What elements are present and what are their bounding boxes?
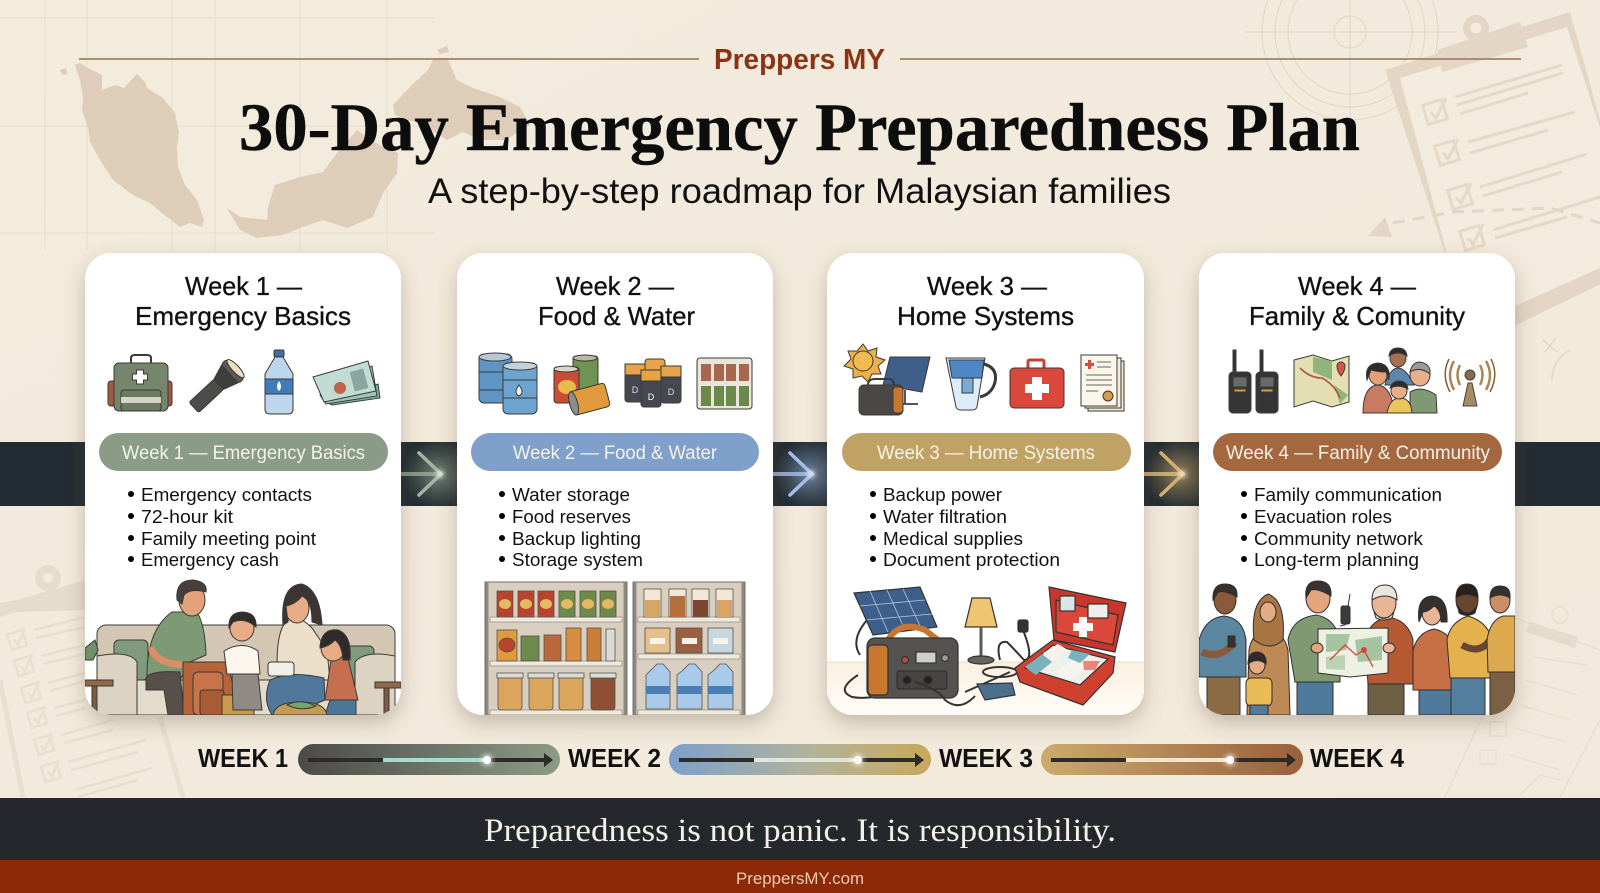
- icon: batteries: D: [648, 392, 655, 402]
- heading: week 2: Food & Water: [538, 301, 695, 331]
- arrow: week 1 to 2: [401, 442, 457, 506]
- pill: week 2: Week 2 — Food & Water: [513, 442, 717, 464]
- pill: week 1: [99, 433, 388, 471]
- icon: water barrels: [479, 353, 537, 414]
- map of Malaysia watermark: [60, 46, 530, 238]
- dark timeline band: [0, 442, 1600, 506]
- panel: week 1: [85, 253, 401, 715]
- list: week 3 actions: Medical supplies: [883, 528, 1023, 549]
- icon: cash banknotes: [313, 361, 380, 405]
- heading: week 4: Week 4 —: [1298, 271, 1416, 301]
- illustration: pantry shelves: [485, 582, 745, 715]
- icon: walkie talkies: [1229, 350, 1278, 413]
- tagline bar: [0, 798, 1600, 860]
- list: week 4 actions: Family communication: [1254, 484, 1442, 505]
- icon: batteries: D: [668, 387, 675, 397]
- heading: week 1: Week 1 —: [185, 271, 302, 301]
- icon: water filter pitcher: [946, 358, 996, 410]
- subtitle: A step-by-step roadmap for Malaysian families: [428, 172, 1171, 211]
- progress bar: week 2 to 3: [669, 744, 931, 775]
- progress bar: week 1 to 2: [298, 744, 560, 775]
- icon: family group: [1363, 348, 1437, 413]
- arrow: week 2 to 3: [773, 442, 827, 506]
- list: week 4 actions: Long-term planning: [1254, 549, 1419, 570]
- clipboard watermark bottom left: [0, 565, 183, 797]
- panel: week 4: [1199, 253, 1515, 715]
- label: week 3: WEEK 3: [939, 743, 1033, 773]
- heading: week 3: Home Systems: [897, 301, 1074, 331]
- icon: water bottle: [265, 350, 293, 414]
- list: week 1 actions: Emergency cash: [141, 549, 279, 570]
- heading: week 3: [897, 271, 1074, 331]
- heading: week 4: [1249, 271, 1465, 331]
- list: week 3 actions: Water filtration: [883, 506, 1007, 527]
- title: 30-Day Emergency Preparedness Plan: [239, 89, 1360, 165]
- list: week 1 actions: Emergency contacts: [141, 484, 312, 505]
- progress bar: week 3 to 4: [1041, 744, 1303, 775]
- list: week 2 actions: Water storage: [512, 484, 630, 505]
- illustration: solar power station and medical case: [827, 587, 1144, 715]
- label: week 1: WEEK 1: [198, 743, 288, 773]
- icon: batteries: [625, 359, 681, 407]
- list: week 1 actions: 72-hour kit: [141, 506, 233, 527]
- list: week 2 actions: Backup lighting: [512, 528, 641, 549]
- list: week 2 actions: Food reserves: [512, 506, 631, 527]
- clipboard watermark bottom right: [1445, 607, 1600, 797]
- list: week 3 actions: [870, 484, 1060, 570]
- list: week 2 actions: Storage system: [512, 549, 643, 570]
- pill: week 4: [1213, 433, 1502, 471]
- pill: week 4: Week 4 — Family & Community: [1226, 442, 1490, 464]
- heading: week 4: Family & Comunity: [1249, 301, 1465, 331]
- pill: week 3: [842, 433, 1131, 471]
- list: week 1 actions: Family meeting point: [141, 528, 316, 549]
- label: week 4: WEEK 4: [1310, 743, 1405, 773]
- heading: week 1: [135, 271, 351, 331]
- icon: batteries: D: [632, 385, 639, 395]
- icon: first aid backpack: [108, 355, 172, 411]
- clipboard watermark top right: [1368, 12, 1600, 380]
- heading: week 2: Week 2 —: [556, 271, 674, 301]
- list: week 3 actions: Backup power: [883, 484, 1002, 505]
- pill: week 3: Week 3 — Home Systems: [877, 442, 1095, 464]
- footer bar: [0, 860, 1600, 893]
- week labels and progress arrows: [198, 743, 1405, 775]
- list: week 4 actions: Evacuation roles: [1254, 506, 1392, 527]
- pill: week 1: Week 1 — Emergency Basics: [122, 442, 365, 464]
- icon: sun, solar panel, power station: [844, 344, 930, 415]
- tagline bar: Preparedness is not panic. It is responsibility.: [484, 813, 1116, 849]
- icon: storage crate: [697, 358, 752, 409]
- icon: radio signal tower: [1445, 359, 1495, 406]
- panel: week 2: [457, 253, 773, 715]
- icon: folded map: [1294, 355, 1349, 407]
- heading: week 3: Week 3 —: [927, 271, 1047, 301]
- list: week 3 actions: Document protection: [883, 549, 1060, 570]
- label: week 2: WEEK 2: [568, 743, 661, 773]
- list: week 1 actions: [128, 484, 316, 570]
- icon: food cans: [554, 355, 610, 416]
- list: week 2 actions: [499, 484, 643, 570]
- heading: week 2: [538, 271, 695, 331]
- arrow: week 3 to 4: [1144, 442, 1199, 506]
- icon: flashlight: [185, 357, 247, 417]
- footer bar: PreppersMY.com: [736, 870, 864, 888]
- list: week 4 actions: [1241, 484, 1442, 570]
- illustration: family packing on sofa: [85, 580, 401, 715]
- heading: week 1: Emergency Basics: [135, 301, 351, 331]
- brand line with name: Preppers MY: [714, 44, 885, 76]
- list: week 4 actions: Community network: [1254, 528, 1424, 549]
- icon: documents: [1081, 355, 1124, 411]
- illustration: community group with map: [1199, 581, 1515, 715]
- reticle watermark: [1245, 0, 1457, 120]
- icon: first aid kit: [1010, 360, 1064, 408]
- panel: week 3: [827, 253, 1144, 715]
- pill: week 2: [471, 433, 759, 471]
